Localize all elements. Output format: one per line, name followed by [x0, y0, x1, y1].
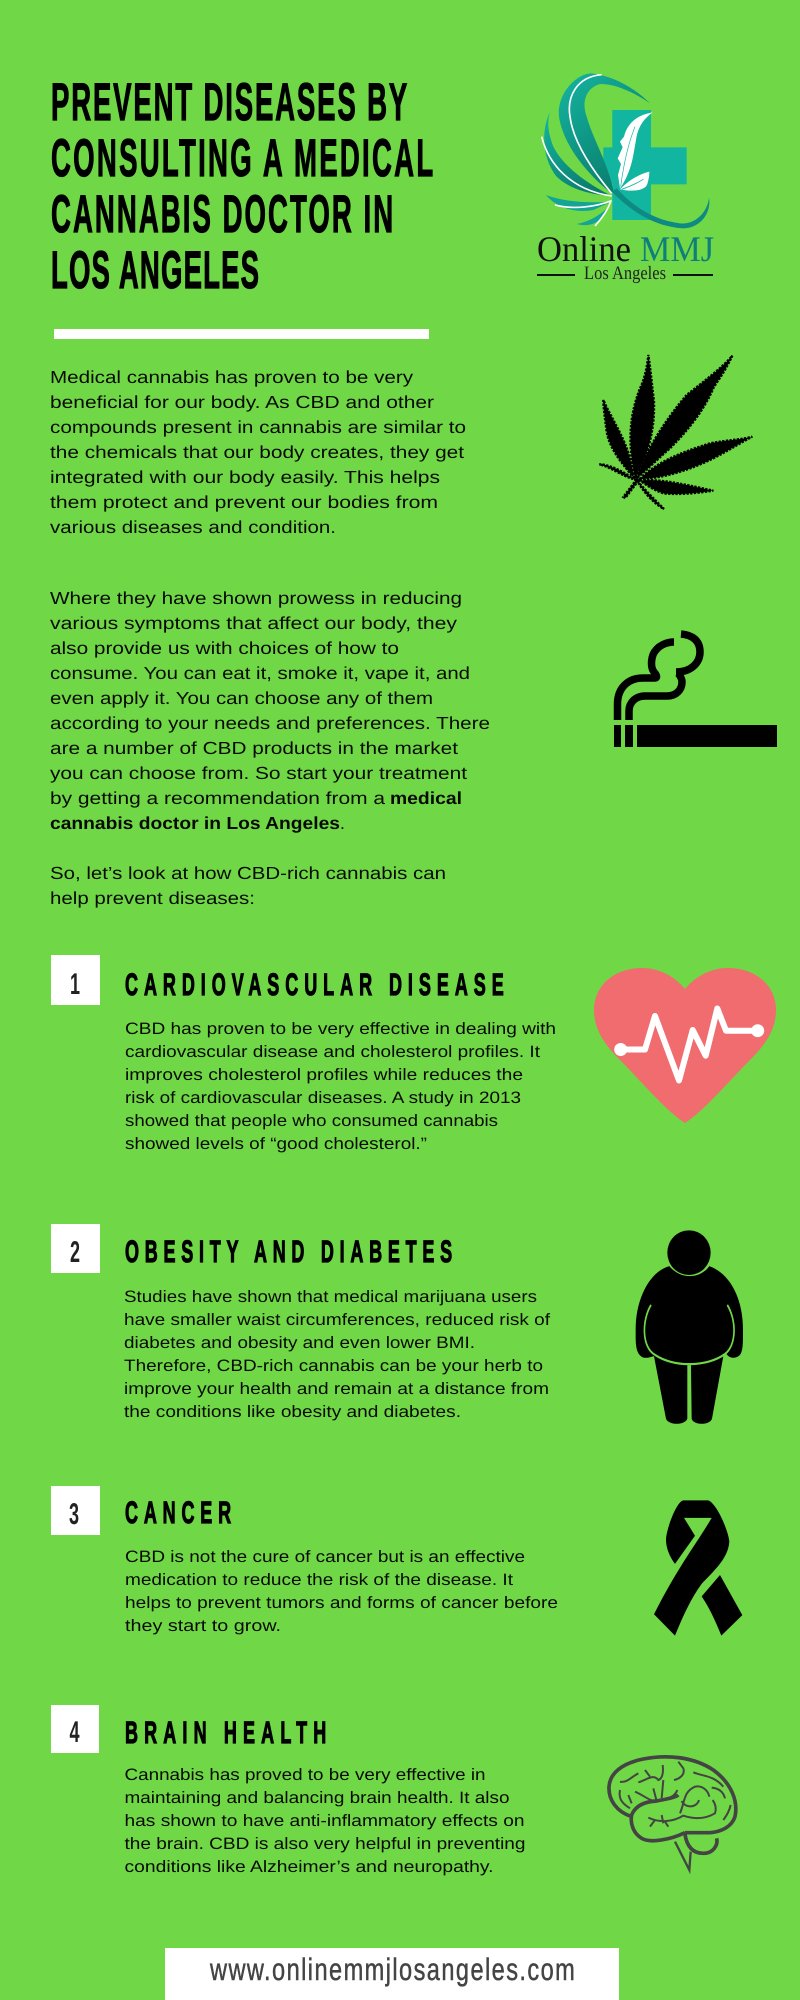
body text: Studies have shown that medical marijuana users — [124, 1288, 537, 1306]
body text: CBD has proven to be very effective in dealing with — [125, 1020, 556, 1038]
text block: intro paragraph 1: beneficial for our body. As CBD and other — [50, 392, 434, 412]
body text: the brain. CBD is also very helpful in preventing — [124, 1835, 526, 1853]
body text: showed levels of “good cholesterol.” — [125, 1135, 427, 1153]
text block: intro paragraph 2: by getting a recommendation from a — [50, 788, 385, 808]
number badge 3 — [51, 1486, 100, 1535]
text block: transition sentence: So, let’s look at how CBD-rich cannabis can — [50, 863, 446, 883]
text block: intro paragraph 2: are a number of CBD products in the market — [50, 738, 458, 758]
logo: Online MMJ Los Angeles — [537, 73, 714, 284]
panel: 2 obesity and diabetes — [51, 1224, 550, 1421]
text block: intro paragraph 2 — [50, 588, 490, 833]
text block: intro paragraph 2: . — [340, 813, 345, 833]
icon: obese person — [636, 1230, 743, 1424]
body text: cardiovascular disease and cholesterol profiles. It — [125, 1043, 540, 1061]
body text: risk of cardiovascular diseases. A study in 2013 — [125, 1089, 521, 1107]
icon: heart with pulse — [594, 968, 776, 1123]
heading: BRAIN HEALTH — [125, 1715, 326, 1750]
body text: they start to grow. — [125, 1617, 281, 1635]
footer: website banner: www.onlinemmjlosangeles.com — [209, 1952, 575, 1987]
text block: intro paragraph 1: compounds present in cannabis are similar to — [50, 417, 466, 437]
text block: intro paragraph 2: various symptoms that affect our body, they — [50, 613, 457, 633]
title: PREVENT DISEASES BY — [51, 73, 407, 132]
body text: improve your health and remain at a distance from — [124, 1380, 549, 1398]
icon: cannabis leaf — [599, 355, 752, 509]
icon: medical cross with leaf — [542, 73, 709, 228]
body text: conditions like Alzheimer’s and neuropathy. — [124, 1858, 494, 1876]
body text — [125, 1020, 556, 1153]
text block: intro paragraph 2: even apply it. You can choose any of them — [50, 688, 433, 708]
logo wordmark: MMJ — [640, 229, 714, 269]
text block: intro paragraph 1 — [50, 367, 466, 537]
text block: intro paragraph 2: cannabis doctor in Los Angeles — [50, 813, 340, 833]
heading: CANCER — [125, 1495, 231, 1530]
text block: intro paragraph 1: Medical cannabis has proven to be very — [50, 367, 413, 387]
heading: CARDIOVASCULAR DISEASE — [125, 967, 504, 1002]
number badge 1 — [51, 955, 100, 1005]
text block: transition sentence — [50, 863, 446, 908]
title: CONSULTING A MEDICAL — [51, 129, 433, 188]
icon: awareness ribbon — [654, 1500, 742, 1636]
title: LOS ANGELES — [51, 241, 259, 300]
body text: helps to prevent tumors and forms of cancer before — [125, 1594, 558, 1612]
heading: OBESITY AND DIABETES — [125, 1234, 452, 1269]
footer: website banner — [165, 1948, 619, 2000]
number badge 2 — [51, 1224, 100, 1273]
text block: intro paragraph 1: the chemicals that our body creates, they get — [50, 442, 464, 462]
body text: Therefore, CBD-rich cannabis can be your herb to — [124, 1357, 543, 1375]
number badge 4 — [51, 1705, 99, 1753]
text block: intro paragraph 2: consume. You can eat it, smoke it, vape it, and — [50, 663, 470, 683]
body text: diabetes and obesity and even lower BMI. — [124, 1334, 475, 1352]
text block: intro paragraph 2: according to your needs and preferences. There — [50, 713, 490, 733]
body text: improves cholesterol profiles while reduces the — [125, 1066, 523, 1084]
text block: intro paragraph 2: medical — [390, 788, 462, 808]
text block: intro paragraph 1: various diseases and condition. — [50, 517, 336, 537]
body text: Cannabis has proved to be very effective in — [124, 1766, 485, 1784]
text block: intro paragraph 2: also provide us with choices of how to — [50, 638, 399, 658]
body text: have smaller waist circumferences, reduced risk of — [124, 1311, 550, 1329]
panel: 1 cardiovascular disease — [51, 955, 556, 1153]
title — [51, 73, 433, 300]
body text — [124, 1766, 526, 1876]
body text: maintaining and balancing brain health. It also — [124, 1789, 509, 1807]
logo wordmark — [537, 229, 714, 284]
divider bar — [54, 329, 429, 339]
logo wordmark: Los Angeles — [584, 263, 666, 284]
number badge 1: 1 — [70, 968, 80, 1001]
body text: the conditions like obesity and diabetes. — [124, 1403, 461, 1421]
number badge 3: 3 — [69, 1498, 79, 1531]
number badge 4: 4 — [69, 1716, 80, 1749]
text block: intro paragraph 2: Where they have shown prowess in reducing — [50, 588, 462, 608]
body text: CBD is not the cure of cancer but is an effective — [125, 1548, 525, 1566]
icon: cigarette with smoke — [614, 634, 777, 747]
panel: 3 cancer — [51, 1486, 558, 1635]
body text: medication to reduce the risk of the disease. It — [125, 1571, 513, 1589]
text block: intro paragraph 2: you can choose from. So start your treatment — [50, 763, 467, 783]
body text — [125, 1548, 558, 1635]
text block: intro paragraph 1: them protect and prevent our bodies from — [50, 492, 438, 512]
number badge 2: 2 — [70, 1236, 80, 1269]
text block: intro paragraph 1: integrated with our body easily. This helps — [50, 467, 440, 487]
body text: has shown to have anti-inflammatory effects on — [124, 1812, 524, 1830]
icon: brain — [609, 1757, 736, 1870]
body text: showed that people who consumed cannabis — [125, 1112, 498, 1130]
panel: 4 brain health — [51, 1705, 526, 1876]
title: CANNABIS DOCTOR IN — [51, 185, 393, 244]
body text — [124, 1288, 550, 1421]
logo wordmark: Online — [537, 229, 631, 269]
text block: transition sentence: help prevent diseases: — [50, 888, 255, 908]
